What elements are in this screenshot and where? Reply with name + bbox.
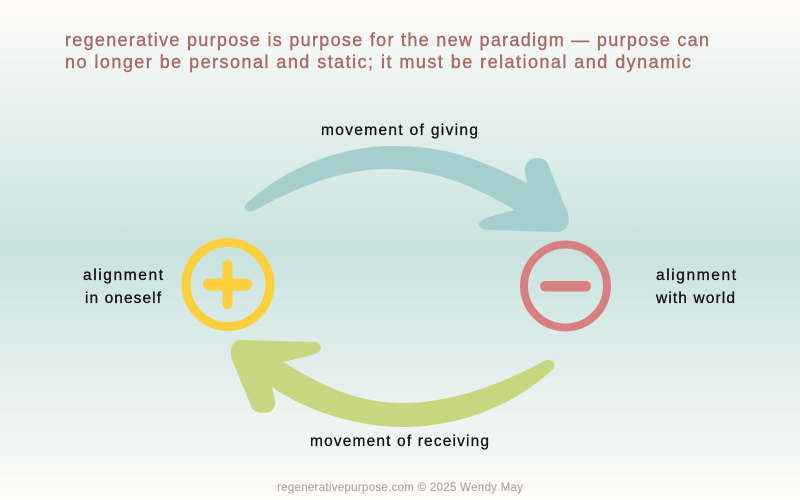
footer credit: regenerativepurpose.com © 2025 Wendy May [277, 482, 523, 494]
icon: plus [186, 242, 270, 326]
title [65, 30, 709, 72]
label: alignment with world: alignment [656, 267, 737, 284]
label: alignment with world [655, 267, 737, 307]
icon: minus [524, 244, 607, 328]
title: no longer be personal and static; it must be relational and dynamic [65, 52, 691, 72]
label: alignment in oneself: alignment [83, 267, 164, 284]
label: alignment with world: with world [655, 290, 735, 307]
label: alignment in oneself: in oneself [85, 290, 162, 307]
label: movement of receiving: movement of receiving [310, 433, 489, 450]
label: movement of giving: movement of giving [321, 122, 478, 139]
arrow: movement of receiving [231, 340, 554, 427]
arrow: movement of giving [245, 146, 569, 232]
label: alignment in oneself [83, 267, 164, 307]
title: regenerative purpose is purpose for the new paradigm — purpose can [65, 30, 709, 50]
